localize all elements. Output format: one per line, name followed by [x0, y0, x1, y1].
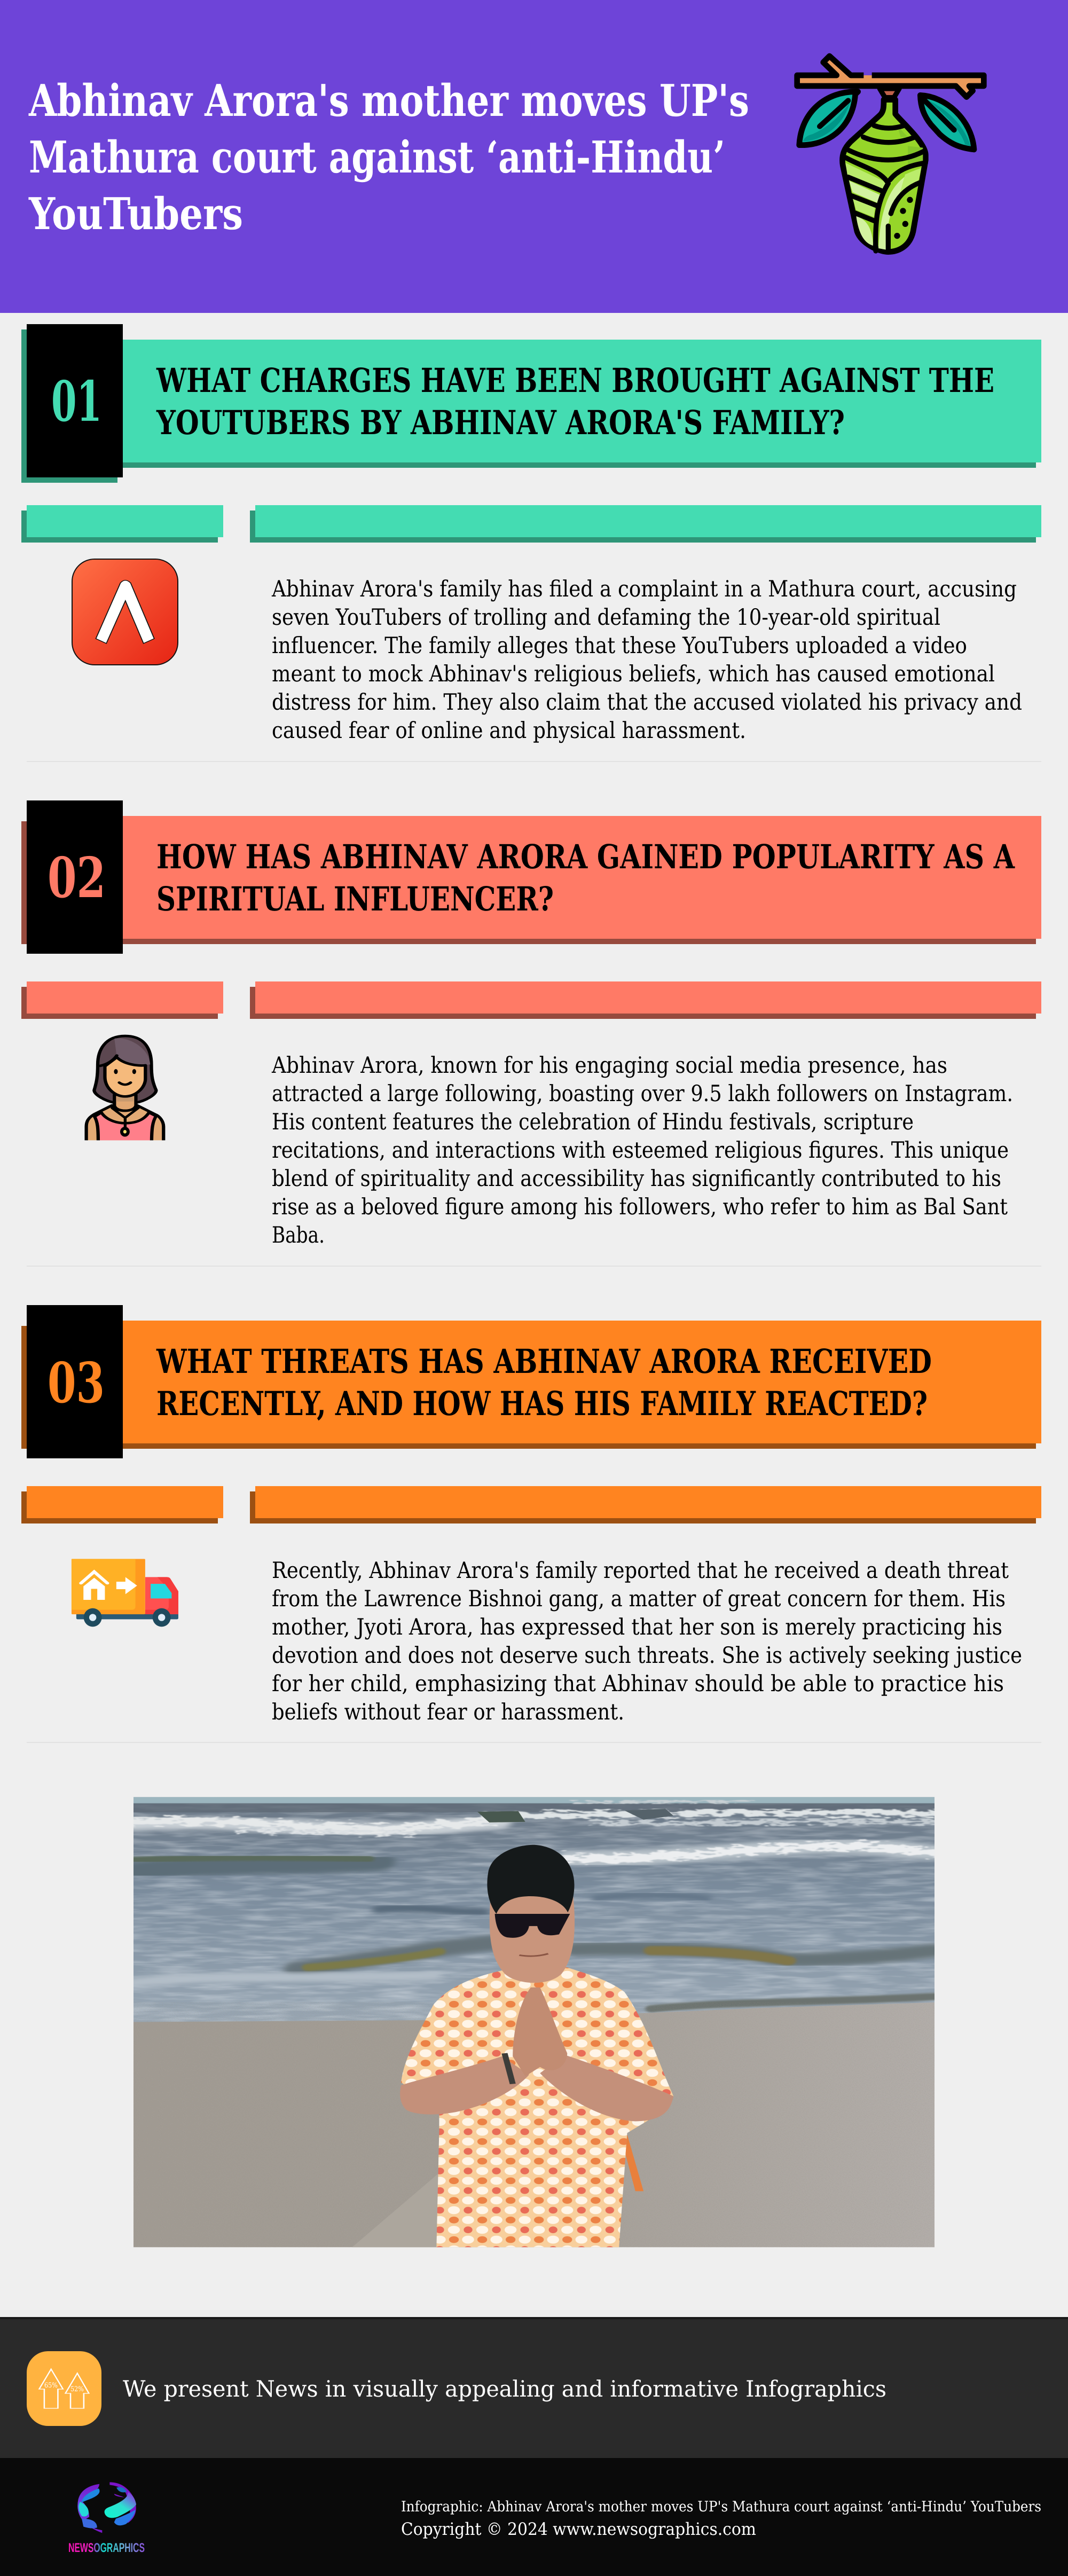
- section 3 body text: beliefs without fear or harassment.: [272, 1699, 624, 1725]
- section 2 body text: Baba.: [272, 1222, 325, 1248]
- section 2 body text: His content features the celebration of Hindu festivals, scripture: [272, 1109, 914, 1135]
- section 2 body text: Abhinav Arora, known for his engaging social media presence, has: [271, 1052, 947, 1078]
- icon: two up arrows with percentages: [27, 2351, 101, 2426]
- section 3 body text: [272, 1557, 1022, 1725]
- icon: moving truck: [72, 1559, 178, 1627]
- footer tagline band: [0, 2317, 1068, 2458]
- icon: woman avatar: [87, 1036, 163, 1143]
- section 2 heading bar: [21, 800, 1041, 954]
- boy figure: [400, 1845, 673, 2247]
- title: Abhinav Arora's mother moves UP's: [28, 75, 749, 127]
- icon: red app tile with chevron: [72, 559, 178, 665]
- icon: two up arrows with percentages: 65%: [44, 2382, 58, 2390]
- section 2 body text: [271, 1052, 1013, 1248]
- footer credit text: Copyright © 2024 www.newsographics.com: [401, 2519, 756, 2539]
- section 1 accent bars: [21, 505, 1041, 543]
- logo: Newsographics: [68, 2482, 145, 2555]
- section 2: [21, 800, 1041, 1248]
- section 3 heading bar: 03: [48, 1350, 105, 1416]
- section 1 heading bar: 01: [51, 368, 102, 434]
- section 3 heading bar: [21, 1305, 1041, 1458]
- header banner: [0, 0, 1068, 313]
- section 1 body text: [271, 576, 1022, 743]
- section 1 heading bar: YOUTUBERS BY ABHINAV ARORA'S FAMILY?: [156, 403, 845, 442]
- title: Mathura court against ‘anti-Hindu’: [29, 132, 725, 183]
- section 2 heading bar: 02: [48, 845, 106, 910]
- logo: Newsographics: NEWSOGRAPHICS: [68, 2541, 145, 2555]
- photo: Abhinav Arora with folded hands on a beach: [134, 1797, 934, 2247]
- icon: chrysalis hanging from a branch: [797, 56, 984, 252]
- title: [28, 75, 749, 240]
- tagline text: We present News in visually appealing and informative Infographics: [123, 2376, 886, 2402]
- section 1: [21, 324, 1041, 743]
- section 3 accent bars: [21, 1486, 1041, 1523]
- section 1 body text: caused fear of online and physical harassment.: [272, 717, 746, 743]
- section 2 heading bar: SPIRITUAL INFLUENCER?: [156, 879, 554, 918]
- section 3 body text: for her child, emphasizing that Abhinav should be able to practice his: [272, 1670, 1004, 1697]
- section 3 body text: mother, Jyoti Arora, has expressed that her son is merely practicing his: [272, 1614, 1002, 1640]
- section 3: [21, 1305, 1041, 1725]
- footer credits band: [0, 2458, 1068, 2576]
- icon: two up arrows with percentages: 52%: [70, 2385, 84, 2393]
- section 2 accent bars: [21, 981, 1041, 1019]
- section 1 body text: seven YouTubers of trolling and defaming the 10-year-old spiritual: [272, 604, 940, 630]
- footer credit text: [401, 2499, 1041, 2539]
- title: YouTubers: [28, 189, 243, 240]
- section 1 body text: influencer. The family alleges that these YouTubers uploaded a video: [272, 632, 967, 658]
- section 1 heading bar: [21, 324, 1041, 483]
- section 1 body text: meant to mock Abhinav's religious beliefs, which has caused emotional: [272, 661, 995, 687]
